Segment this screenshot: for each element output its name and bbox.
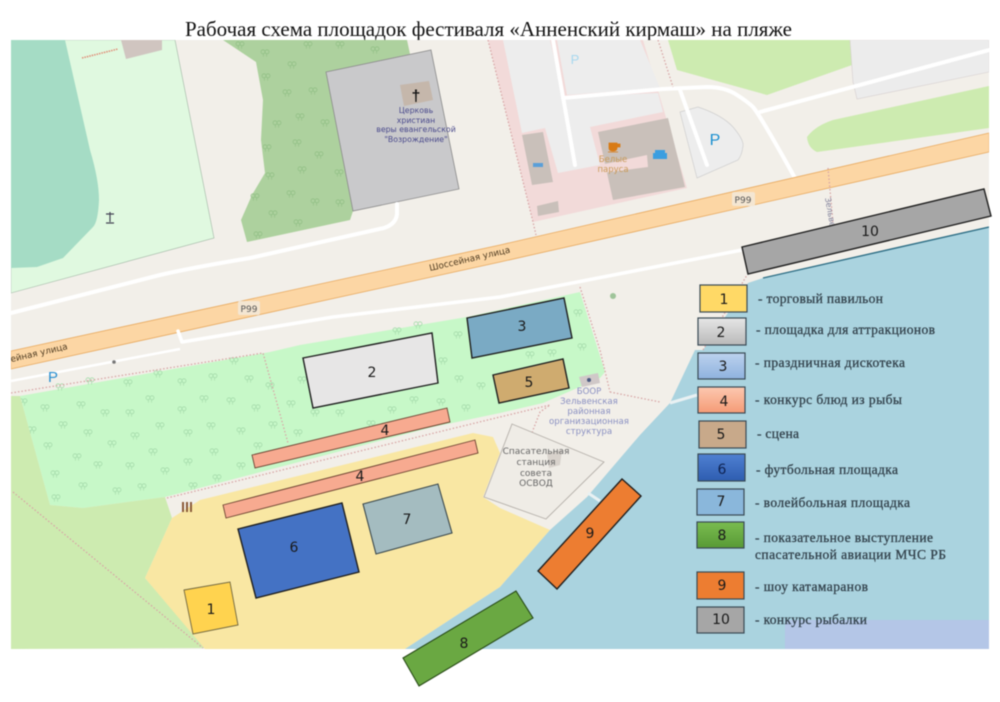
- meadow, bottom left: [11, 396, 205, 649]
- legend item 10: [697, 607, 867, 633]
- zone 6: football: [238, 503, 359, 598]
- legend item 9: [697, 572, 868, 599]
- BOOR label with building: БООР: [577, 387, 601, 397]
- title: Рабочая схема площадок фестиваля «Анненский кирмаш» на пляже: [185, 17, 792, 41]
- zone 10: fishing contest: 10: [861, 224, 879, 240]
- street: Shosseynaya: Р99: [241, 305, 258, 315]
- shopping block with parking: P: [571, 52, 579, 67]
- dotted boundaries: [11, 40, 833, 648]
- shopping block with parking: паруса: [597, 165, 629, 175]
- small map icons: Зельвен: [823, 197, 838, 233]
- zone 8: rescue aviation: 8: [460, 636, 468, 652]
- legend item 9: 9: [718, 578, 726, 594]
- legend item 6: - футбольная площадка: [756, 462, 898, 477]
- legend item 2: 2: [717, 325, 725, 341]
- street: Shosseynaya: [0, 133, 989, 371]
- legend item 7: 7: [717, 494, 725, 510]
- legend item 2: [698, 318, 935, 345]
- legend item 8: спасательной авиации МЧС РБ: [755, 547, 946, 562]
- rescue station plot: [484, 424, 604, 519]
- legend item 3: 3: [719, 359, 727, 375]
- church plot: христиан: [397, 116, 435, 125]
- BOOR label with building: организационная: [549, 417, 629, 427]
- BOOR label with building: [549, 373, 629, 437]
- legend item 4: - конкурс блюд из рыбы: [755, 392, 902, 407]
- zone 5: stage: [493, 359, 569, 403]
- legend item 10: 10: [712, 612, 730, 628]
- zone 3: disco: [467, 298, 572, 358]
- church plot: †: [412, 88, 420, 105]
- piers: [588, 395, 697, 501]
- rescue station plot: ОСВОД: [519, 479, 553, 489]
- rescue station plot: совета: [520, 469, 552, 479]
- legend item 1: 1: [720, 292, 728, 308]
- zone 5: stage: 5: [525, 375, 533, 391]
- shopping block with parking: Белые: [599, 155, 627, 165]
- small map icons: [182, 197, 838, 512]
- shopping block with parking: [488, 40, 687, 222]
- water: [405, 227, 989, 649]
- parking and junction roads: [663, 87, 795, 178]
- BOOR label with building: Зельвенская: [560, 397, 618, 407]
- legend item 7: - волейбольная площадка: [755, 495, 910, 510]
- beach sand: [145, 433, 550, 649]
- zone 3: disco: 3: [518, 319, 526, 335]
- legend item 4: 4: [720, 394, 729, 410]
- lavender patch: [785, 620, 989, 649]
- street: Shosseynaya: Шоссейная улица: [428, 246, 511, 274]
- wooded area by church: [223, 40, 410, 242]
- legend item 9: - шоу катамаранов: [755, 579, 868, 594]
- zone 4: fish dishes upper: 4: [381, 423, 390, 439]
- legend item 5: 5: [717, 427, 725, 443]
- street: Shosseynaya: Р99: [735, 196, 752, 206]
- legend item 8: 8: [718, 528, 726, 544]
- service roads, upper: [11, 204, 397, 313]
- legend item 8: [697, 522, 946, 562]
- legend item 3: - праздничная дискотека: [755, 355, 905, 370]
- legend item 1: [700, 285, 883, 312]
- BOOR label with building: районная: [567, 407, 611, 417]
- parking and junction roads: P: [710, 132, 720, 149]
- zone 10: fishing contest: [742, 189, 991, 274]
- zone 4: fish dishes lower: [223, 440, 478, 518]
- legend item 1: - торговый павильон: [758, 291, 883, 306]
- zone 4: fish dishes lower: 4: [356, 469, 365, 485]
- zone 6: football: 6: [290, 540, 299, 556]
- legend item 2: - площадка для аттракционов: [756, 322, 935, 337]
- legend item 6: 6: [718, 462, 727, 478]
- legend item 6: [698, 454, 898, 481]
- rescue station plot: Спасательная: [503, 447, 569, 457]
- church plot: "Возрождение": [384, 135, 448, 144]
- rescue station plot: станция: [517, 458, 555, 468]
- legend item 5: - сцена: [757, 426, 799, 441]
- park with pond, top left: [11, 40, 214, 293]
- zone 7: volleyball: 7: [403, 512, 411, 528]
- zone 9: catamarans: [538, 479, 641, 589]
- legend item 8: - показательное выступление: [755, 530, 933, 545]
- legend item 10: - конкурс рыбалки: [755, 612, 867, 627]
- zone 7: volleyball: [363, 484, 452, 554]
- zone 1: trade pavilion: 1: [207, 602, 215, 618]
- church plot: веры евангельской: [376, 125, 456, 134]
- legend item 4: [698, 387, 902, 413]
- lower side road and parking: [11, 250, 742, 386]
- zone 9: catamarans: 9: [586, 526, 594, 542]
- light forest: [19, 292, 605, 508]
- legend item 3: [698, 353, 905, 379]
- zone 2: attractions: [303, 333, 438, 408]
- green areas, top right: [668, 40, 989, 152]
- legend item 5: [699, 421, 799, 448]
- lower side road and parking: P: [48, 369, 58, 386]
- church plot: Церковь: [399, 106, 434, 115]
- BOOR label with building: структура: [566, 427, 612, 437]
- zone 4: fish dishes upper: [252, 408, 450, 468]
- zone 2: attractions: 2: [368, 365, 376, 381]
- legend item 7: [697, 489, 910, 515]
- legend: [697, 285, 946, 633]
- zone 1: trade pavilion: [184, 582, 238, 634]
- zone 8: rescue aviation: [403, 591, 533, 686]
- church plot: [326, 50, 459, 211]
